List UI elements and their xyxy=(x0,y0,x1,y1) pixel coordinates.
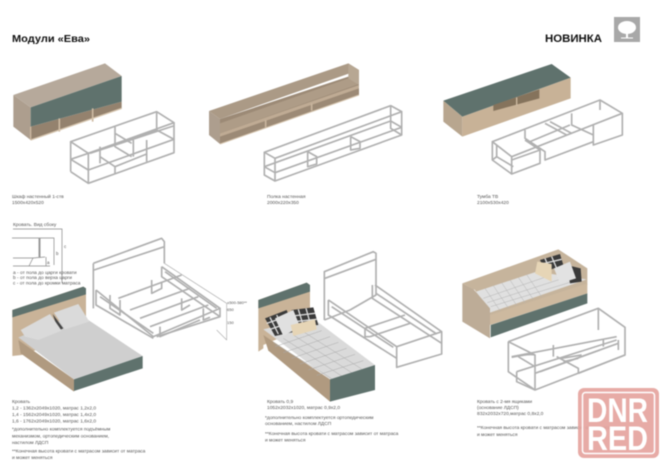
diagram: bed side view: Кровать. Вид сбоку xyxy=(13,222,57,228)
legend: bed measurements: а - от пола до царги кровати xyxy=(13,271,77,276)
double bed render xyxy=(12,287,143,392)
diagram: bed side view: b xyxy=(56,251,59,256)
caption: double bed: механизмом, ортопедическим основанием, xyxy=(12,434,109,440)
legend: bed measurements: c - от пола до кромки матраса xyxy=(13,282,81,286)
caption: double bed: **Конечная высота кровати с матрасом зависит от матраса xyxy=(12,448,146,454)
caption: bed with drawers: и может меняться xyxy=(477,433,518,438)
caption: single bed: **Конечная высота кровати с матрасом зависит от матраса xyxy=(265,431,399,437)
caption: wall shelf: 2000х220х350 xyxy=(267,200,299,206)
diagram: bed side view: a xyxy=(47,260,50,265)
legend: bed measurements: b - от пола до верха царги xyxy=(13,275,72,281)
caption: double bed: Кровать xyxy=(12,400,30,405)
caption: wall cabinet: 1500х420х520 xyxy=(12,200,44,206)
caption: double bed: 1,2 - 1362х2049х1020, матрас 1,2х2,0 xyxy=(12,406,96,412)
badge: new: НОВИНКА xyxy=(545,33,602,45)
bed with drawers render xyxy=(462,249,587,338)
diagram: bed side view xyxy=(12,222,67,283)
watermark: DNR RED: DNR xyxy=(587,392,648,430)
caption: bed with drawers: Кровать с 2-мя ящиками xyxy=(477,400,532,405)
single bed wireframe xyxy=(324,252,442,367)
dimension labels: 150 xyxy=(227,320,234,325)
dimension labels: ±500-580** xyxy=(227,300,247,305)
caption: wall shelf: Полка настенная xyxy=(267,195,305,200)
watermark: DNR RED xyxy=(578,388,659,458)
module: wall cabinet render xyxy=(13,63,122,140)
watermark: DNR RED: RED xyxy=(587,420,648,458)
single bed render xyxy=(258,283,375,402)
title: Модули «Ева» xyxy=(12,33,90,45)
caption: double bed: 1,4 - 1562х2049х1020, матрас 1,4х2,0 xyxy=(12,412,96,418)
double bed wireframe xyxy=(93,238,227,340)
caption: double bed: настилом ЛДСП xyxy=(12,440,49,446)
caption: single bed: и может меняться xyxy=(265,438,306,444)
module: wall cabinet wireframe xyxy=(71,112,174,183)
module: TV stand wireframe xyxy=(492,100,622,174)
caption: bed with drawers: **Конечная высота кровати с матрасом зависит от матраса xyxy=(477,425,611,431)
caption: single bed: 1052х2032х1020, матрас 0,9х2,0 xyxy=(267,405,340,411)
diagram: bed side view: c xyxy=(64,244,67,249)
icon: tree logo xyxy=(614,17,640,42)
bed with drawers wireframe xyxy=(508,308,625,390)
caption: TV stand: 2100х530х420 xyxy=(477,200,509,206)
caption: single bed: *дополнительно комплектуется ортопедическим xyxy=(265,415,374,421)
dimension labels: 650 xyxy=(227,307,234,312)
caption: bed with drawers: (основание ЛДСП) xyxy=(477,405,519,411)
caption: bed with drawers: 832х2032х720,матрас 0,8х2,0 xyxy=(477,411,544,417)
caption: double bed: и может меняться xyxy=(12,456,53,461)
caption: double bed: 1,6 - 1762х2049х1020, матрас 1,6х2,0 xyxy=(12,418,96,424)
caption: single bed: Кровать 0,9 xyxy=(267,400,293,405)
caption: TV stand: Тумба ТВ xyxy=(477,195,498,200)
module: wall shelf wireframe xyxy=(264,106,402,181)
caption: double bed: *дополнительно комплектуется подъёмным xyxy=(12,426,110,432)
module: TV stand render xyxy=(443,64,571,137)
module: wall shelf render xyxy=(209,63,359,144)
caption: single bed: основанием, настилом ЛДСП xyxy=(265,421,332,427)
caption: wall cabinet: Шкаф настенный 1-ств xyxy=(12,195,64,200)
dimension labels xyxy=(227,300,247,325)
